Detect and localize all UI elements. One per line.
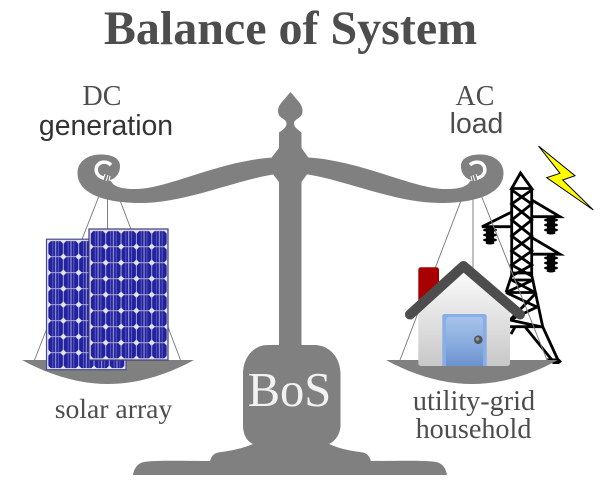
scroll curl: left bbox=[96, 162, 111, 181]
label: AC load: AC bbox=[456, 81, 494, 112]
label: BoS: BoS bbox=[248, 364, 331, 417]
roof bbox=[410, 266, 520, 314]
base bbox=[133, 345, 447, 475]
icon: transmission tower bbox=[482, 173, 562, 364]
title: Balance of System bbox=[104, 2, 477, 55]
left pan bbox=[22, 360, 194, 384]
label: AC load: load bbox=[450, 108, 503, 140]
label: utility-grid household: utility-grid bbox=[413, 386, 535, 417]
insulator: upper right bbox=[544, 216, 558, 234]
icon: solar panel back bbox=[46, 239, 126, 370]
insulator: left bbox=[483, 226, 497, 244]
scale strings bbox=[34, 190, 547, 360]
door bbox=[442, 314, 487, 366]
beam right arm bbox=[296, 154, 504, 203]
icon: lightning bolt bbox=[538, 146, 593, 210]
label: DC generation: DC bbox=[83, 81, 121, 112]
scroll curl: right bbox=[470, 162, 485, 181]
icon: house bbox=[410, 266, 520, 366]
walls bbox=[418, 268, 510, 366]
pillar and finial bbox=[272, 92, 308, 350]
chimney bbox=[418, 267, 439, 307]
label: solar array: solar array bbox=[55, 393, 172, 424]
label: AC load bbox=[450, 81, 503, 140]
label: DC generation bbox=[39, 81, 173, 142]
icon: solar panel front bbox=[89, 229, 168, 360]
right pan bbox=[386, 360, 558, 384]
scale: beam and stand bbox=[78, 92, 504, 475]
tower foot bbox=[546, 358, 562, 364]
label: utility-grid household: household bbox=[416, 414, 531, 445]
label: utility-grid household bbox=[413, 386, 535, 445]
insulator: lower right bbox=[544, 254, 558, 272]
beam left arm bbox=[78, 154, 285, 203]
label: DC generation: generation bbox=[39, 110, 173, 142]
